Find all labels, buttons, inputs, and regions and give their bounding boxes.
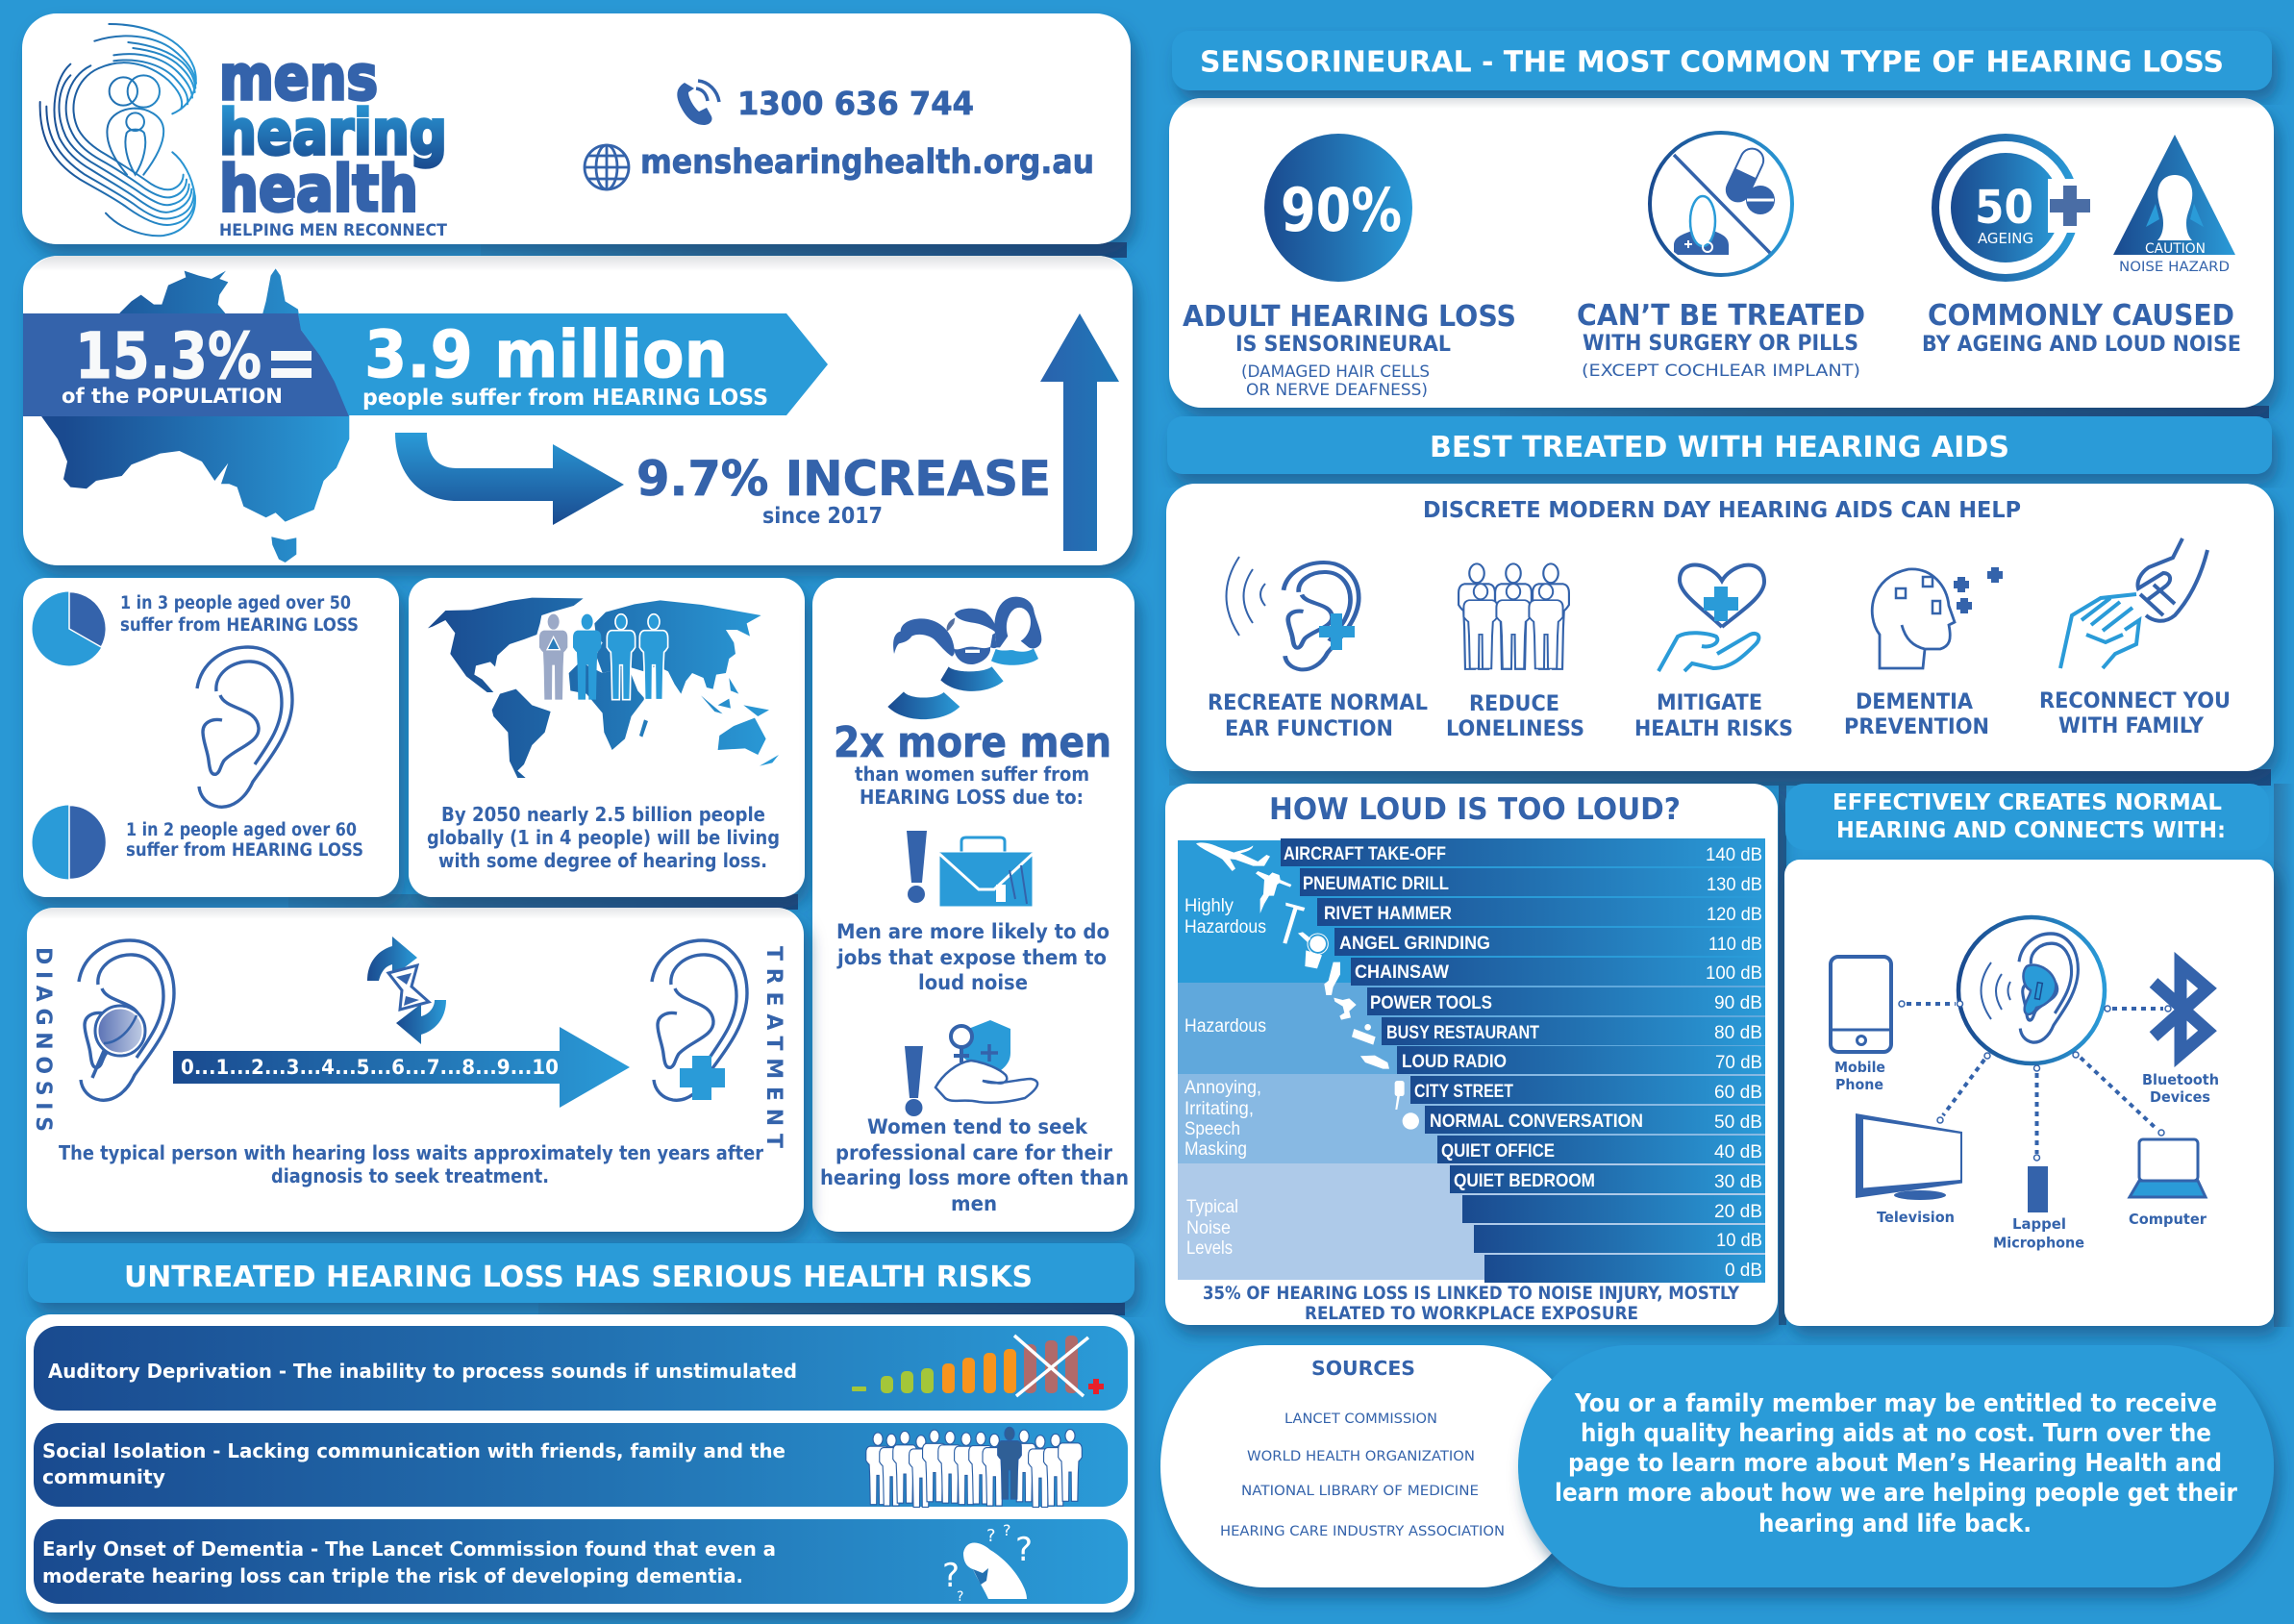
bar labels: AIRCRAFT TAKE-OFF — [1284, 843, 1446, 864]
icon: 50 plus: AGEING — [1978, 230, 2033, 247]
text: 1 in 3 — [120, 593, 359, 636]
fact: ageing and noise: BY AGEING AND LOUD NOISE — [1922, 333, 2241, 357]
text: by 2050: By 2050 nearly 2.5 billion people — [441, 803, 765, 826]
fact: ageing and noise: COMMONLY CAUSED — [1928, 299, 2234, 333]
bar labels: CITY STREET — [1414, 1081, 1513, 1102]
icon: briefcase — [907, 831, 1033, 907]
panel: world projection — [409, 578, 805, 897]
icon: caution noise hazard — [2113, 135, 2235, 275]
text: women: professional care for their — [835, 1141, 1113, 1164]
benefit: dementia prevention — [1844, 567, 2003, 739]
heading: sensorineural: SENSORINEURAL - THE MOST COMMON TYPE OF HEARING LOSS — [1200, 46, 2224, 79]
panel: population statistics — [23, 256, 1133, 565]
bar labels: ANGEL GRINDING — [1339, 933, 1490, 954]
benefit: mitigate health risks — [1634, 565, 1793, 741]
icon: 50 plus: 50 — [1975, 181, 2033, 235]
icon: hourglass cycle — [367, 937, 446, 1044]
text: 1 in 3: suffer from HEARING LOSS — [120, 615, 359, 636]
bar labels: PNEUMATIC DRILL — [1303, 873, 1449, 894]
icon: phone — [677, 81, 719, 125]
panel: sources: LANCET COMMISSION — [1284, 1412, 1437, 1427]
panel: logo and contact — [22, 13, 1131, 244]
panel: sensorineural facts — [1169, 98, 2274, 408]
panel: hearing aid benefits — [1166, 484, 2274, 771]
text: 1 in 2 — [126, 820, 363, 861]
bar labels: BUSY RESTAURANT — [1386, 1022, 1539, 1043]
icon: ear with plus — [652, 940, 747, 1100]
banner arrow: 3.9 million: 3.9 million — [364, 317, 728, 393]
text: jobs: loud noise — [918, 971, 1028, 994]
bar labels: QUIET OFFICE — [1441, 1140, 1555, 1162]
icon: 50 plus — [1935, 137, 2092, 278]
callout: entitlement message: You or a family member may be entitled to receive — [1574, 1389, 2217, 1418]
decibel values: 40 dB — [1714, 1142, 1762, 1162]
text: increase: since 2017 — [762, 504, 883, 529]
icon: confused person: ? — [1015, 1531, 1033, 1569]
panel: sources: SOURCES — [1311, 1357, 1415, 1380]
panel: how loud is too loud — [1165, 784, 1778, 1325]
decibel values: 0 dB — [1725, 1261, 1762, 1281]
fact: cannot be treated: WITH SURGERY OR PILLS — [1583, 332, 1858, 356]
text: typical wait: diagnosis to seek treatment. — [271, 1164, 549, 1187]
icon: care — [905, 1020, 1037, 1116]
panel: men versus women — [812, 578, 1135, 1232]
heading: 2x more men — [834, 718, 1111, 809]
decibel values: 110 dB — [1708, 935, 1762, 955]
logo wordmark: mens — [219, 43, 378, 114]
benefit: reduce loneliness: LONELINESS — [1446, 717, 1584, 741]
benefit: recreate ear function: EAR FUNCTION — [1225, 717, 1393, 741]
heading: untreated health risks — [28, 1243, 1135, 1303]
icon: crowd — [866, 1427, 1082, 1507]
device: mobile phone: Phone — [1835, 1076, 1883, 1093]
world map — [428, 598, 779, 778]
row: social isolation: Social Isolation - Lacking communication with friends, family and the — [42, 1439, 785, 1462]
device: lapel microphone: Microphone — [1993, 1235, 2084, 1252]
heading: 2x more men: 2x more men — [834, 718, 1111, 767]
logo wordmark: hearing — [219, 98, 447, 169]
panel: sources — [1160, 1345, 1583, 1587]
benefit: dementia prevention: DEMENTIA — [1856, 690, 1973, 714]
row: auditory deprivation: Auditory Deprivation - The inability to process sounds if unstimulated — [48, 1360, 797, 1383]
footnote — [1203, 1283, 1739, 1324]
row: dementia — [34, 1519, 1128, 1605]
fact: cannot be treated: (EXCEPT COCHLEAR IMPLANT) — [1582, 362, 1860, 381]
icon: doctor — [1674, 196, 1729, 255]
arrow: ten year wait — [173, 1027, 630, 1108]
text: typical wait: The typical person with hearing loss waits approximately ten years after — [59, 1141, 763, 1164]
zone labels: Typical — [1186, 1197, 1238, 1217]
text: jobs: jobs that expose them to — [836, 946, 1107, 969]
icon: caution noise hazard: CAUTION — [2145, 241, 2206, 257]
connection lines — [1899, 1001, 2171, 1161]
zone labels: Highly — [1184, 896, 1234, 916]
icon: pills — [1722, 143, 1775, 214]
label: diagnosis: DIAGNOSIS — [31, 947, 55, 1132]
decibel values: 70 dB — [1715, 1053, 1762, 1073]
decibel values: 50 dB — [1714, 1112, 1762, 1133]
bar labels: RIVET HAMMER — [1324, 903, 1452, 924]
map of Australia — [38, 268, 349, 562]
bar labels: POWER TOOLS — [1370, 992, 1492, 1013]
text: 1 in 2: suffer from HEARING LOSS — [126, 840, 363, 861]
text: by 2050 — [427, 803, 780, 872]
icon: confused person: ? — [957, 1589, 963, 1605]
text: women: Women tend to seek — [867, 1115, 1088, 1138]
fact: cannot be treated: CAN’T BE TREATED — [1577, 299, 1865, 333]
decibel values: 10 dB — [1716, 1231, 1762, 1251]
text: jobs — [836, 920, 1110, 994]
zone labels: Noise — [1186, 1218, 1231, 1238]
banner arrow: 3.9 million: of the POPULATION — [62, 385, 283, 408]
zone labels: Annoying, — [1184, 1078, 1261, 1098]
stat: 90 percent: ADULT HEARING LOSS — [1183, 300, 1516, 334]
benefit: mitigate health risks: HEALTH RISKS — [1634, 717, 1793, 741]
icon: confused person: ? — [986, 1526, 996, 1546]
text: by 2050: globally (1 in 4 people) will be living — [427, 826, 780, 849]
icon: caution noise hazard: NOISE HAZARD — [2119, 260, 2230, 275]
banner arrow: 3.9 million — [23, 313, 828, 416]
device: lapel microphone — [1993, 1166, 2084, 1252]
website: menshearinghealth.org.au — [640, 143, 1094, 182]
text: by 2050: with some degree of hearing loss. — [438, 849, 767, 872]
heading: sensorineural — [1172, 31, 2272, 90]
text: 1 in 2: 1 in 2 people aged over 60 — [126, 820, 357, 840]
pie: 1 in 3 — [33, 592, 106, 665]
benefit: reconnect with family: WITH FAMILY — [2058, 714, 2205, 738]
heading: connects with — [1785, 784, 2269, 850]
device: lapel microphone: Lappel — [2012, 1215, 2066, 1233]
stat: 90 percent: (DAMAGED HAIR CELLS — [1241, 362, 1430, 382]
decibel values: 140 dB — [1706, 845, 1762, 865]
benefit: reconnect with family — [2039, 538, 2231, 738]
icon: globe — [585, 145, 629, 189]
decibel values — [1706, 845, 1762, 1281]
bar labels: LOUD RADIO — [1402, 1051, 1507, 1072]
row: auditory deprivation — [34, 1326, 1128, 1411]
heading: untreated health risks: UNTREATED HEARING LOSS HAS SERIOUS HEALTH RISKS — [124, 1261, 1033, 1294]
device: television: Television — [1877, 1209, 1955, 1226]
zone labels: Masking — [1184, 1139, 1247, 1160]
arrow: up — [1040, 313, 1119, 551]
decibel values: 100 dB — [1706, 963, 1762, 984]
label: treatment: TREATMENT — [761, 946, 785, 1148]
text: women: men — [951, 1192, 997, 1215]
noise source icons — [1196, 842, 1419, 1130]
arrow: ten year wait: 0...1...2...3...4...5...6...7...8...9...10 — [181, 1056, 559, 1079]
heading: 2x more men: than women suffer from — [855, 762, 1089, 786]
icon: volume bars — [852, 1336, 1104, 1396]
zone labels: Irritating, — [1184, 1099, 1254, 1119]
decibel values: 60 dB — [1714, 1083, 1762, 1103]
panel: age pies and ear — [23, 578, 399, 897]
bars — [1281, 838, 1765, 1283]
stat: 90 percent: OR NERVE DEAFNESS) — [1246, 381, 1428, 400]
text: increase: 9.7% INCREASE — [636, 451, 1051, 507]
decibel values: 90 dB — [1714, 993, 1762, 1013]
benefit: dementia prevention: PREVENTION — [1844, 715, 1989, 739]
callout: entitlement message: high quality hearing aids at no cost. Turn over the — [1581, 1419, 2211, 1448]
device: bluetooth: Bluetooth — [2142, 1071, 2219, 1088]
benefit: recreate ear function — [1208, 557, 1428, 741]
heading: best treated: BEST TREATED WITH HEARING AIDS — [1430, 431, 2009, 464]
text: typical wait — [59, 1141, 763, 1187]
logo wordmark — [219, 43, 448, 239]
logo wordmark: HELPING MEN RECONNECT — [219, 221, 448, 239]
decibel values: 20 dB — [1714, 1202, 1762, 1222]
device: computer — [2129, 1139, 2207, 1228]
people figures — [539, 614, 668, 700]
hearing aid in ear — [1958, 917, 2105, 1063]
logo emblem — [40, 24, 196, 236]
text: 1 in 3: 1 in 3 people aged over 50 — [120, 593, 351, 613]
bar labels: QUIET BEDROOM — [1454, 1170, 1595, 1191]
icon: confused person — [942, 1521, 1033, 1605]
zone labels: Hazardous — [1184, 917, 1266, 937]
subheading: DISCRETE MODERN DAY HEARING AIDS CAN HELP — [1423, 498, 2021, 523]
banner arrow: 3.9 million: people suffer from HEARING LOSS — [362, 386, 768, 411]
row: dementia: Early Onset of Dementia - The Lancet Commission found that even a — [42, 1537, 776, 1561]
fact: ageing and noise — [1922, 135, 2241, 357]
stat: 90 percent: IS SENSORINEURAL — [1235, 333, 1451, 357]
text: women — [820, 1115, 1129, 1215]
chart: noise levels — [1178, 838, 1765, 1283]
bar labels — [1284, 843, 1643, 1191]
panel: diagnosis to treatment — [27, 908, 804, 1232]
heading: connects with: EFFECTIVELY CREATES NORMAL — [1833, 790, 2222, 815]
stat: 90 percent — [1183, 134, 1516, 400]
callout: entitlement message: hearing and life back. — [1758, 1510, 2032, 1538]
benefit: reduce loneliness: REDUCE — [1469, 692, 1559, 716]
device: mobile phone — [1831, 957, 1891, 1093]
device: mobile phone: Mobile — [1834, 1059, 1885, 1076]
device: bluetooth — [2142, 965, 2219, 1106]
row: dementia: moderate hearing loss can triple the risk of developing dementia. — [42, 1564, 743, 1587]
panel: sources: HEARING CARE INDUSTRY ASSOCIATION — [1220, 1524, 1505, 1539]
icon: ear with magnifier — [79, 940, 174, 1100]
decibel values: 80 dB — [1714, 1023, 1762, 1043]
decibel values: 120 dB — [1707, 905, 1762, 925]
text: women: hearing loss more often than — [820, 1166, 1129, 1189]
device: television — [1856, 1113, 1962, 1226]
row: social isolation — [34, 1423, 1128, 1507]
benefit: reconnect with family: RECONNECT YOU — [2039, 689, 2231, 713]
decibel values: 130 dB — [1707, 875, 1762, 895]
phone number: 1300 636 744 — [737, 85, 974, 122]
row: social isolation: community — [42, 1465, 165, 1488]
stat: 90 percent: 90% — [1281, 175, 1402, 245]
icon: three people — [887, 597, 1041, 719]
zone labels: Hazardous — [1184, 1016, 1266, 1037]
panel: sources: NATIONAL LIBRARY OF MEDICINE — [1241, 1484, 1479, 1499]
heading: HOW LOUD IS TOO LOUD? — [1269, 792, 1681, 827]
logo wordmark: health — [219, 152, 418, 226]
zone labels: Levels — [1186, 1238, 1233, 1259]
panel: health risks — [26, 1314, 1135, 1612]
device: computer: Computer — [2129, 1211, 2207, 1228]
bar labels: CHAINSAW — [1355, 962, 1450, 983]
benefit: mitigate health risks: MITIGATE — [1657, 691, 1762, 715]
text: jobs: Men are more likely to do — [836, 920, 1110, 943]
footnote: 35% OF HEARING LOSS IS LINKED TO NOISE INJURY, MOSTLY — [1203, 1283, 1739, 1304]
decibel values: 30 dB — [1714, 1172, 1762, 1192]
callout: entitlement message: page to learn more about Men’s Hearing Health and — [1568, 1449, 2222, 1478]
fact: cannot be treated — [1577, 133, 1865, 381]
zone labels: Speech — [1184, 1119, 1240, 1139]
arrow: curved increase — [395, 433, 624, 525]
pie: 1 in 2 — [33, 806, 106, 879]
heading: best treated — [1167, 416, 2272, 474]
icon: confused person: ? — [942, 1557, 960, 1595]
zone labels — [1184, 896, 1266, 1259]
banner arrow: 3.9 million: 15.3% — [75, 319, 262, 393]
bar labels: NORMAL CONVERSATION — [1430, 1111, 1643, 1132]
panel: connectivity — [1784, 860, 2274, 1326]
benefit: recreate ear function: RECREATE NORMAL — [1208, 691, 1428, 715]
heading: connects with: HEARING AND CONNECTS WITH: — [1836, 818, 2226, 843]
device: bluetooth: Devices — [2150, 1088, 2210, 1106]
footnote: RELATED TO WORKPLACE EXPOSURE — [1305, 1303, 1638, 1324]
callout: entitlement message — [1518, 1345, 2274, 1587]
panel: sources: WORLD HEALTH ORGANIZATION — [1247, 1449, 1475, 1464]
icon: confused person: ? — [1003, 1521, 1011, 1539]
icon: ear — [197, 647, 292, 807]
benefit: reduce loneliness — [1446, 563, 1584, 741]
heading: 2x more men: HEARING LOSS due to: — [860, 786, 1084, 809]
